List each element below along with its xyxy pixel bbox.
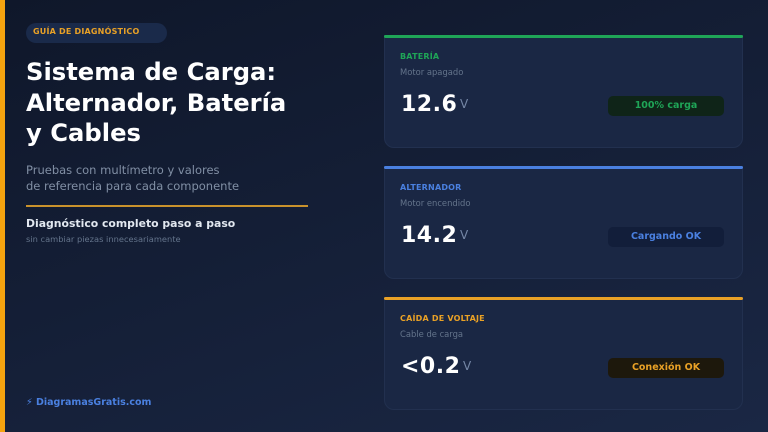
panel: alternador: ALTERNADOR [400, 183, 462, 192]
panel: caída de voltaje: Cable de carga [400, 329, 463, 339]
title: Alternador, Batería [26, 88, 286, 116]
panel: caída de voltaje: V [463, 359, 471, 373]
panel: caída de voltaje: CAÍDA DE VOLTAJE [400, 314, 485, 323]
subtitle: Pruebas con multímetro y valores [26, 163, 220, 177]
panel: caída de voltaje [384, 297, 743, 410]
panel: caída de voltaje: <0.2 [401, 354, 460, 379]
subtitle [26, 163, 239, 193]
accent stripe [0, 0, 5, 432]
note text: sin cambiar piezas innecesariamente [26, 234, 181, 244]
panel: alternador: Motor encendido [400, 198, 470, 208]
panel: batería: 100% carga [635, 100, 697, 111]
panel: batería: Motor apagado [400, 67, 463, 77]
panel: batería: 12.6 [401, 92, 457, 117]
title [26, 57, 286, 147]
panel: batería: BATERÍA [400, 52, 439, 61]
highlight text: Diagnóstico completo paso a paso [26, 217, 235, 230]
panel: caída de voltaje: Conexión OK [632, 362, 700, 373]
panel: alternador: V [460, 228, 468, 242]
panel: batería [384, 35, 743, 148]
panel: batería: V [460, 97, 468, 111]
badge [26, 23, 167, 43]
panel: alternador [384, 166, 743, 279]
panel: alternador: Cargando OK [631, 231, 701, 242]
panel: alternador: 14.2 [401, 223, 457, 248]
title: Sistema de Carga: [26, 57, 276, 86]
subtitle: de referencia para cada componente [26, 179, 239, 193]
title: y Cables [26, 118, 141, 147]
divider [26, 205, 308, 207]
badge: GUÍA DE DIAGNÓSTICO [33, 27, 139, 36]
footer brand: ⚡ DiagramasGratis.com [26, 397, 151, 408]
